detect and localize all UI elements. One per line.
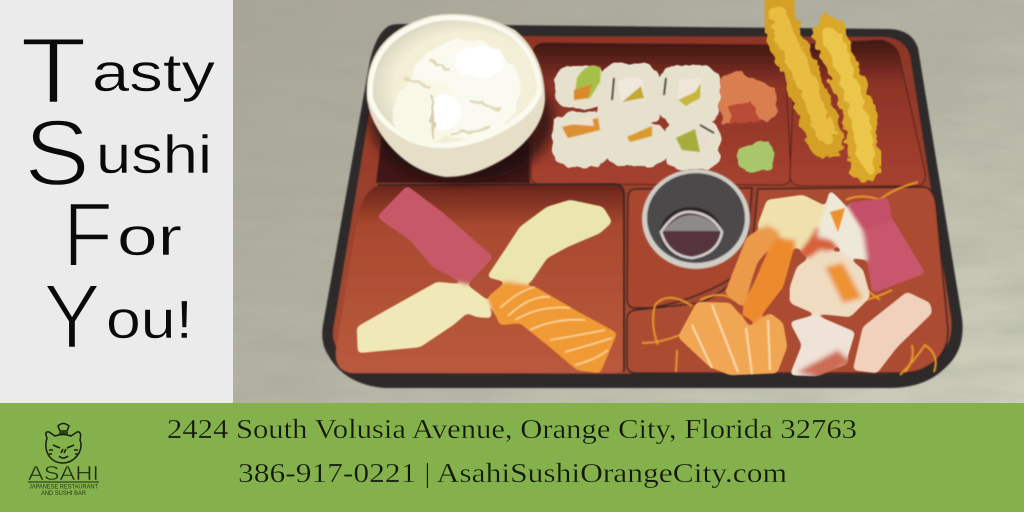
phone and website: 386-917-0221 | AsahiSushiOrangeCity.com — [238, 458, 787, 488]
title: Tasty — [20, 18, 215, 123]
logo: Asahi: AND SUSHI BAR — [41, 491, 87, 497]
sashimi — [678, 190, 932, 376]
title: For: or — [117, 207, 182, 267]
shredded carrot — [642, 182, 936, 375]
title panel — [0, 0, 233, 403]
title: For: F — [63, 184, 113, 286]
title: Sushi — [24, 100, 212, 205]
compartment: maki — [531, 43, 791, 185]
rice mound — [392, 40, 520, 144]
address: 2424 South Volusia Avenue, Orange City, Florida 32763 — [167, 414, 857, 444]
logo: Asahi — [28, 424, 99, 497]
soy sauce cup — [642, 169, 750, 269]
title: Sushi: ushi — [96, 125, 212, 185]
title: You!: ou! — [106, 290, 193, 350]
title: You!: Y — [43, 266, 101, 368]
title: You! — [43, 266, 193, 368]
nigiri sushi — [357, 186, 617, 373]
compartment: rice — [376, 44, 530, 183]
bowl of rice — [367, 14, 554, 182]
compartment: tempura — [790, 40, 925, 186]
bento tray — [322, 24, 963, 388]
photo: bento box on steel table — [233, 0, 1024, 403]
title: For — [63, 184, 182, 286]
logo tagline: JAPANESE RESTAURANT — [29, 484, 98, 490]
pickled ginger and wasabi — [720, 72, 778, 173]
compartment: nigiri — [336, 185, 624, 373]
logo wordmark: ASAHI — [28, 463, 99, 485]
title: Tasty: T — [20, 18, 87, 123]
footer band — [0, 403, 1024, 512]
maki rolls — [552, 63, 721, 170]
title: Sushi: S — [24, 100, 90, 205]
tempura shrimp — [778, 12, 868, 165]
title: Tasty: asty — [92, 43, 215, 103]
compartment: soy — [627, 188, 752, 308]
compartment: sashimi lower — [627, 187, 948, 373]
icon: cat face — [46, 424, 81, 463]
